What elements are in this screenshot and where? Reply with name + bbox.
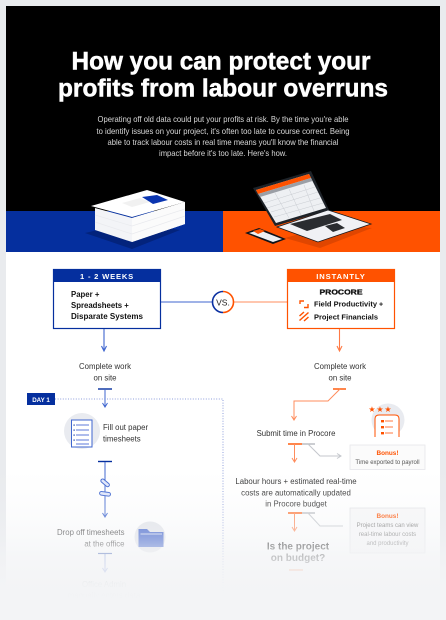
icon: timesheet document [64, 413, 100, 449]
intro text [96, 115, 350, 158]
panel: 1-2 weeks: Disparate Systems [71, 312, 144, 321]
tag: day 1: DAY 1 [32, 397, 50, 404]
text: fill out paper timesheets [103, 423, 148, 444]
callout: bonus real-time costs: Project teams can view [357, 523, 419, 529]
text: complete work right [314, 362, 366, 382]
intro text: Operating off old data could put your profits at risk. By the time you're able [98, 115, 349, 124]
panel: instantly: PROCORE [320, 288, 363, 296]
text: office admin [68, 580, 141, 600]
callout: bonus payroll: Time exported to payroll [355, 460, 420, 466]
callout: bonus real-time costs [350, 508, 425, 553]
panel: 1-2 weeks: Paper + [71, 290, 100, 299]
arrow: step 1 left [98, 389, 112, 407]
text: fill out paper timesheets: Fill out paper [103, 423, 148, 432]
arrow: left start [102, 329, 106, 351]
arrow: paper clips [98, 462, 112, 517]
callout: bonus payroll [350, 445, 425, 470]
header panel [6, 6, 440, 252]
callout: bonus real-time costs: Bonus! [376, 513, 399, 520]
callout: bonus real-time costs: real-time labour costs [359, 532, 416, 538]
title [58, 48, 388, 102]
intro text: to identify issues on your project, it's often too late to course correct. Being [96, 127, 350, 136]
arrow: budget branch [288, 513, 343, 531]
text: office admin: manually enters data [68, 591, 141, 600]
text: complete work right: on site [329, 374, 351, 382]
icon: starred list: ★ [376, 405, 384, 414]
text: drop off timesheets: at the office [84, 540, 124, 548]
text: fill out paper timesheets: timesheets [103, 434, 141, 444]
day 1 dotted frame [55, 399, 223, 600]
panel text: products [314, 300, 383, 322]
arrow: right start [337, 329, 342, 351]
bottom fade overlay [0, 470, 446, 620]
text: labour hours [235, 477, 357, 508]
panel text: products: + [379, 302, 383, 308]
vs badge: VS. [216, 298, 230, 308]
text: submit time: Submit time in Procore [257, 429, 335, 438]
text: complete work left: Complete work [79, 362, 131, 371]
icon: starred list: ★ [384, 405, 392, 414]
panel: 1-2 weeks: Spreadsheets + [71, 301, 129, 310]
text: complete work left: on site [94, 374, 116, 382]
bar: after budget question [289, 569, 303, 571]
connector: versus line left [161, 301, 212, 303]
text: is the project on budget: on budget? [271, 553, 325, 564]
panel text: products: Project Financials [314, 312, 378, 322]
text: drop off timesheets: Drop off timesheets [57, 528, 125, 537]
text: office admin: Office Admin [82, 580, 126, 589]
icon: starred list [368, 404, 404, 437]
panel: instantly: INSTANTLY [316, 272, 366, 281]
text: labour hours: costs are automatically updated [241, 488, 351, 498]
icon: starred list: ★ [368, 405, 376, 414]
panel text: products: Field Productivity [314, 300, 378, 308]
title: How you can protect your [72, 48, 371, 76]
intro text: able to track labour costs in real time means you'll know the financial [108, 138, 339, 147]
callout: bonus payroll: Bonus! [376, 450, 399, 457]
arrow: step 3 left [98, 554, 112, 572]
panel: 1-2 weeks: 1 - 2 WEEKS [80, 272, 134, 281]
callout: bonus real-time costs: and productivity [366, 541, 409, 547]
panel: instantly [287, 269, 395, 328]
text: complete work left [79, 362, 131, 382]
icon: folder [134, 522, 166, 552]
arrow: hours branch [288, 444, 341, 462]
title: profits from labour overruns [58, 74, 388, 102]
tag: day 1 [27, 393, 55, 405]
text: is the project on budget: Is the project [267, 542, 330, 552]
text: is the project on budget [267, 542, 330, 564]
icon: field productivity [300, 301, 308, 308]
text: labour hours: in Procore budget [265, 500, 328, 508]
illustration: paper stack [85, 190, 185, 249]
arrow: submit branch [292, 389, 346, 420]
panel: 1-2 weeks [53, 269, 161, 328]
connector: versus line right [234, 301, 287, 303]
vs badge [212, 292, 234, 312]
text: labour hours: Labour hours + estimated real-time [235, 477, 357, 486]
text: drop off timesheets [57, 528, 125, 548]
text: complete work right: Complete work [314, 362, 366, 371]
illustration: laptop and phone [245, 171, 372, 248]
icon: project financials [300, 312, 308, 321]
intro text: impact before it's too late. Here's how. [159, 149, 287, 158]
